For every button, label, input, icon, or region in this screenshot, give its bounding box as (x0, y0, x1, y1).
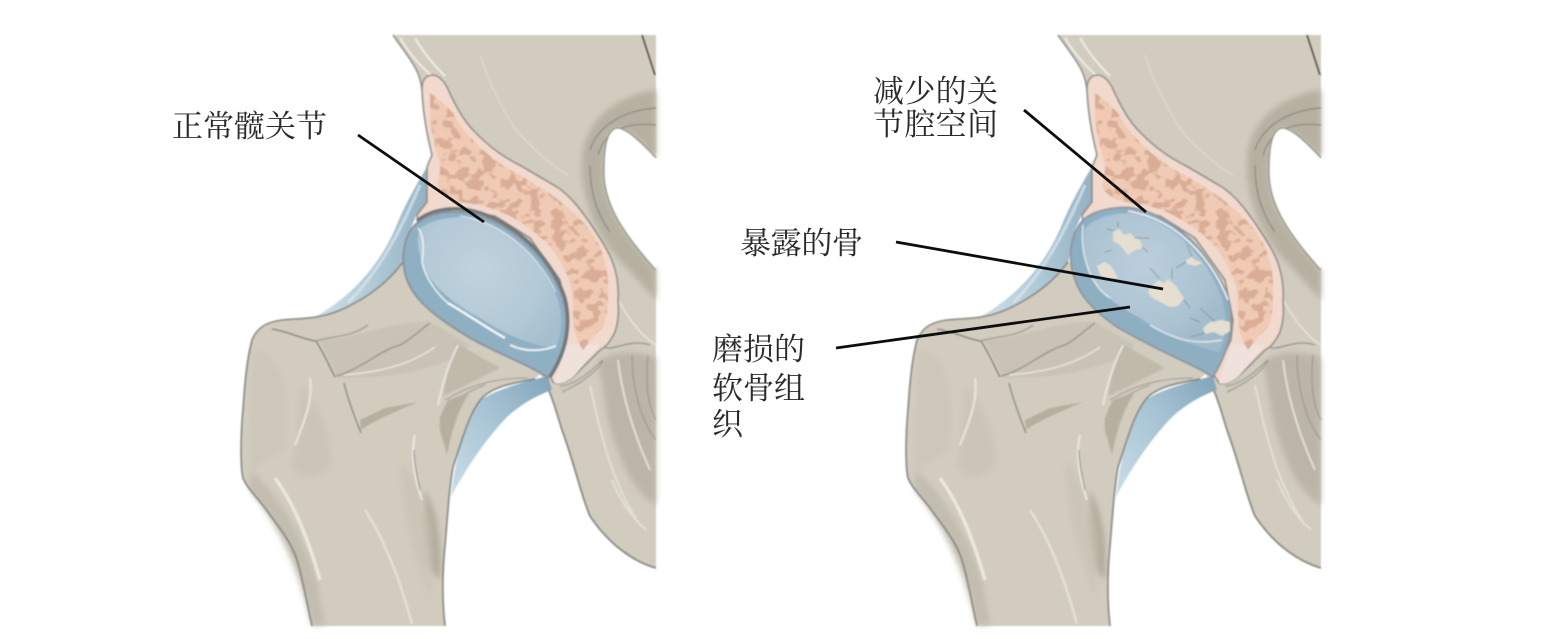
joint space arc (417, 209, 568, 377)
surface cracks (1105, 222, 1215, 337)
black corner line (642, 35, 655, 75)
right hip: osteoarthritis (906, 35, 1321, 626)
label: worn cartilage: 磨损的 (712, 332, 805, 367)
pelvis and femur anatomy (906, 35, 1321, 626)
left hip: normal joint (241, 35, 656, 626)
leader line: exposed bone (896, 242, 1163, 289)
label: worn cartilage (712, 307, 1130, 442)
femoral head (403, 209, 568, 378)
black corner line (1307, 35, 1320, 75)
femoral head worn (1071, 207, 1231, 377)
label: exposed bone (740, 226, 1163, 289)
label: exposed bone: 暴露的骨 (740, 226, 863, 261)
label: reduced joint space: 减少的关 (873, 74, 998, 109)
exposed bone patches (1097, 229, 1230, 336)
label: normal hip joint (172, 109, 484, 222)
label: worn cartilage: 织 (712, 407, 744, 442)
label: reduced joint space (873, 74, 1146, 212)
pelvis and femur anatomy (241, 35, 656, 626)
leader line: reduced joint space (1024, 110, 1146, 212)
leader line: worn cartilage (836, 307, 1130, 348)
label: normal hip joint: 正常髋关节 (172, 109, 327, 144)
label: worn cartilage: 软骨组 (712, 371, 805, 406)
leader line: normal hip joint (358, 135, 484, 222)
label: reduced joint space: 节腔空间 (873, 107, 998, 142)
